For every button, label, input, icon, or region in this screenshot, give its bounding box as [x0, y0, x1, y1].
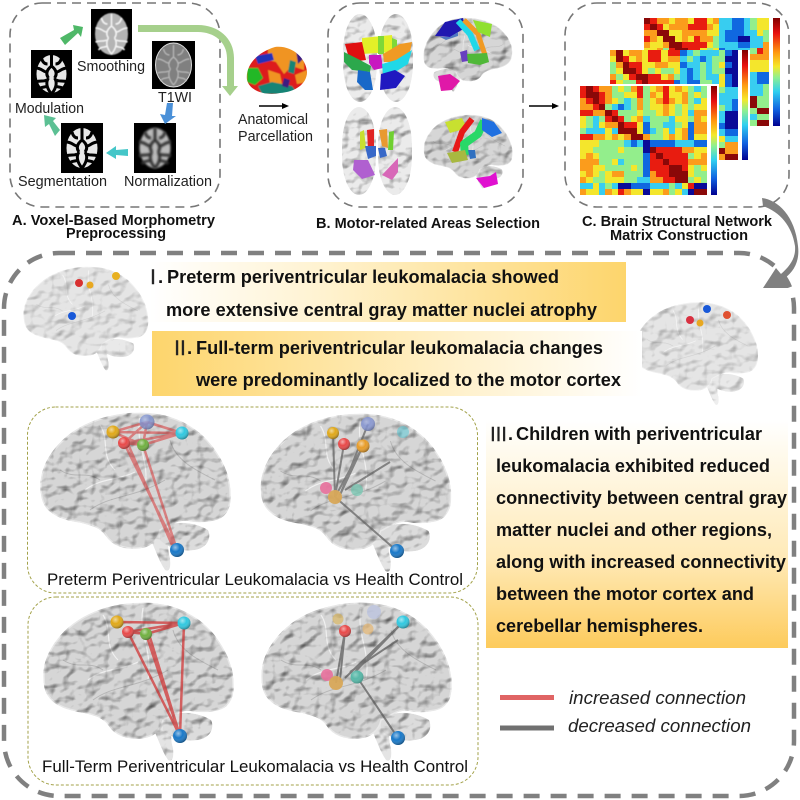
heading B: B. Motor-related Areas Selection [316, 216, 540, 232]
label: Anatomical Parcellation: Parcellation [238, 129, 313, 145]
panel B: motor-related areas [328, 3, 523, 207]
finding II banner [152, 331, 642, 396]
arrow: modulation to smoothing [60, 25, 83, 45]
label: Modulation: Modulation [15, 101, 84, 117]
outer dashed results panel [4, 253, 794, 796]
side view brain with cortical regions [424, 18, 512, 91]
heading C [582, 214, 773, 244]
label: Normalization: Normalization [124, 174, 212, 190]
panel A dashed border [10, 3, 220, 207]
panel: preterm vs health control [28, 407, 478, 593]
caption: preterm: Preterm Periventricular Leukomalacia vs Health Control [47, 570, 463, 589]
arrow: preprocessing to parcellation [138, 25, 238, 96]
label: T1WI: T1WI [158, 90, 192, 106]
panel border [28, 597, 478, 785]
finding III text block: leukomalacia exhibited reduced [496, 456, 770, 476]
caption: full-term: Full-Term Periventricular Leukomalacia vs Health Control [42, 757, 468, 776]
panel: full-term vs health control [28, 597, 478, 785]
finding III text block: matter nuclei and other regions, [496, 520, 772, 540]
finding II banner: Ⅱ [170, 338, 190, 360]
arrow: segmentation to modulation [44, 115, 60, 136]
finding I banner: more extensive central gray matter nuclei atrophy [166, 299, 598, 320]
brain: preterm increased connections [41, 413, 230, 571]
label: Smoothing: Smoothing [77, 59, 145, 75]
finding II banner: were predominantly localized to the motor cortex [195, 369, 622, 390]
arrow B to C [529, 103, 559, 109]
finding III text block: cerebellar hemispheres. [496, 616, 703, 636]
finding III text block: connectivity between central gray [496, 488, 787, 508]
segmentation slice image [61, 123, 103, 173]
modulation slice image [31, 50, 72, 98]
label: Anatomical Parcellation: Anatomical [238, 112, 308, 128]
small brain: preterm atrophy locations [24, 267, 148, 370]
icon: parcellated brain [246, 46, 307, 94]
back matrix [644, 18, 780, 126]
panel A: voxel-based morphometry preprocessing [10, 3, 220, 207]
label: Segmentation: Segmentation [18, 174, 107, 190]
legend: increased connection: increased connection [569, 687, 746, 708]
legend [500, 687, 751, 736]
heading A [12, 213, 215, 242]
brain: full-term increased connections [44, 603, 233, 761]
bottom view brain with subcortical regions [342, 107, 412, 195]
normalization slice image [134, 123, 176, 173]
finding I banner: Ⅰ [143, 267, 163, 289]
finding III text block [486, 420, 788, 648]
finding III text block: Ⅲ [489, 425, 508, 446]
finding II banner: . [187, 337, 192, 358]
panel border [28, 407, 478, 593]
heading C: C. Brain Structural Network [582, 214, 773, 230]
small brain: full-term atrophy locations [635, 303, 758, 405]
heading A: A. Voxel-Based Morphometry [12, 213, 215, 229]
finding II banner: Full-term periventricular leukomalacia changes [196, 337, 603, 358]
brain: preterm decreased connections [261, 414, 451, 572]
finding I banner: Preterm periventricular leukomalacia showed [167, 266, 559, 287]
finding I banner: . [158, 266, 163, 287]
finding III text block: Children with periventricular [516, 424, 762, 444]
T1WI slice image [152, 41, 195, 89]
smoothing slice image [91, 9, 132, 59]
arrow to anatomical parcellation [259, 103, 289, 109]
middle matrix [606, 50, 750, 160]
label: Anatomical Parcellation [238, 112, 313, 145]
arrow: normalization to segmentation [106, 146, 128, 159]
finding III text block: between the motor cortex and [496, 584, 754, 604]
arrow: T1WI to normalization [160, 103, 176, 124]
finding III text block: . [508, 424, 513, 444]
top view brain with cortical regions [343, 14, 413, 102]
brain: full-term decreased connections [262, 603, 451, 761]
finding III text block: along with increased connectivity [496, 552, 786, 572]
matrix stack [580, 18, 780, 195]
side view brain with motor regions [424, 115, 512, 188]
front matrix [578, 84, 719, 197]
panel B dashed border [328, 3, 523, 207]
heading A: Preprocessing [66, 226, 166, 242]
legend: decreased connection: decreased connection [568, 715, 751, 736]
finding I banner [143, 262, 626, 322]
panel C dashed border [565, 3, 789, 207]
heading C: Matrix Construction [610, 228, 748, 244]
